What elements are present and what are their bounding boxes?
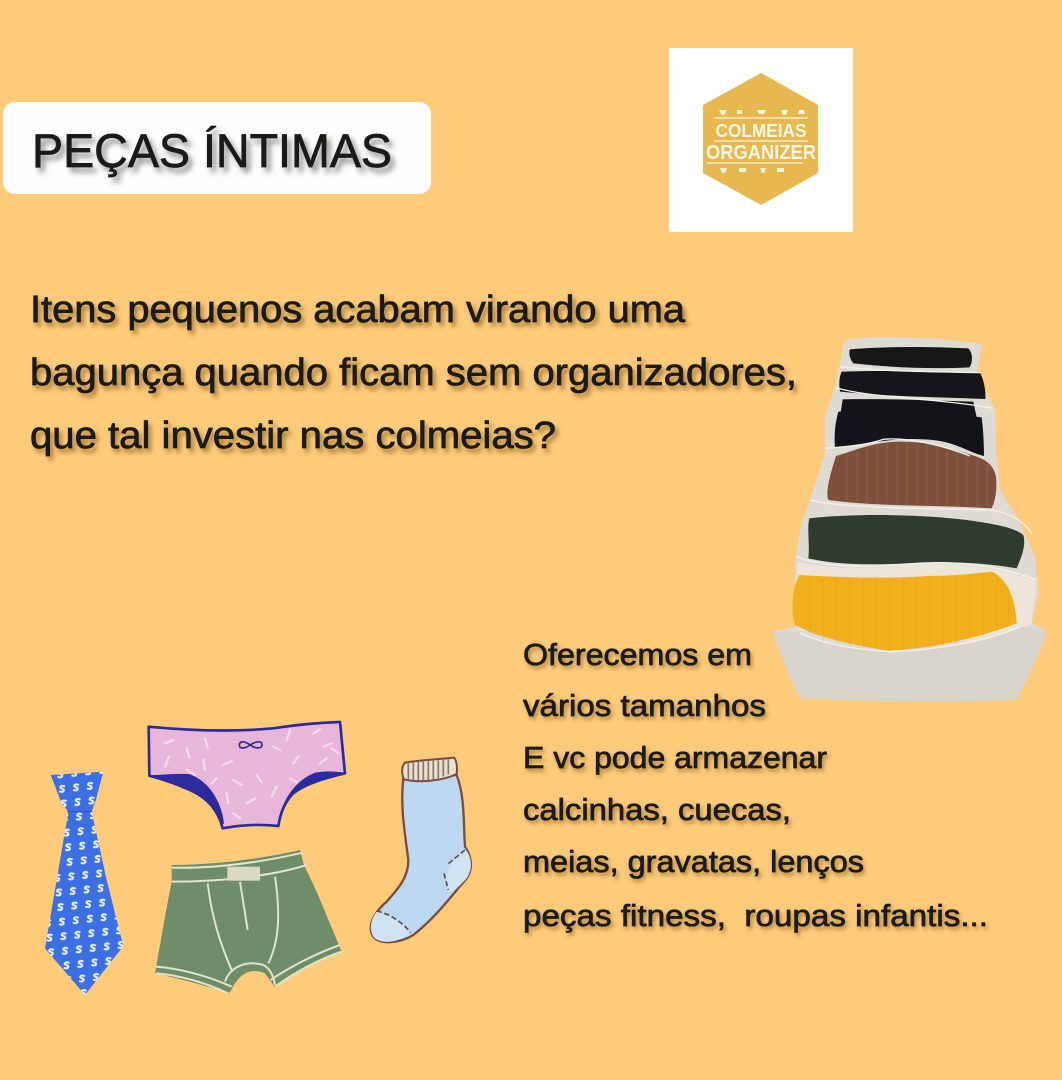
logo wordmark: ORGANIZER <box>706 142 817 164</box>
side paragraph <box>523 637 988 933</box>
front panel <box>773 627 1047 702</box>
icon: boxer briefs <box>155 850 342 993</box>
side paragraph: meias, gravatas, lenços <box>523 844 864 879</box>
logo wordmark: COLMEIAS <box>716 121 806 141</box>
panel behind yellow roll <box>797 562 1037 643</box>
intro paragraph: que tal investir nas colmeias? <box>30 415 556 457</box>
organizer photo <box>773 337 1047 702</box>
illustration: underwear set <box>45 722 471 995</box>
brown roll <box>827 442 996 508</box>
icon: panties <box>149 722 345 828</box>
side paragraph: Oferecemos em <box>523 637 752 672</box>
black rolls <box>835 347 985 456</box>
intro paragraph: Itens pequenos acabam virando uma <box>30 289 686 331</box>
intro paragraph: bagunça quando ficam sem organizadores, <box>30 352 797 394</box>
side paragraph: vários tamanhos <box>523 688 766 723</box>
side paragraph: E vc pode armazenar <box>523 740 827 775</box>
yellow roll <box>792 572 1017 651</box>
logo wordmark <box>706 121 817 164</box>
intro paragraph <box>30 289 797 457</box>
green roll <box>808 515 1024 568</box>
icon: tie <box>45 772 123 995</box>
logo: Colmeias Organizer <box>669 48 853 232</box>
side paragraph: calcinhas, cuecas, <box>523 792 791 827</box>
heading: PEÇAS ÍNTIMAS: PEÇAS ÍNTIMAS <box>32 124 392 177</box>
title badge <box>3 102 431 194</box>
icon: sock <box>371 758 471 942</box>
side paragraph: peças fitness, roupas infantis... <box>523 898 988 933</box>
divider lips <box>797 367 1037 580</box>
